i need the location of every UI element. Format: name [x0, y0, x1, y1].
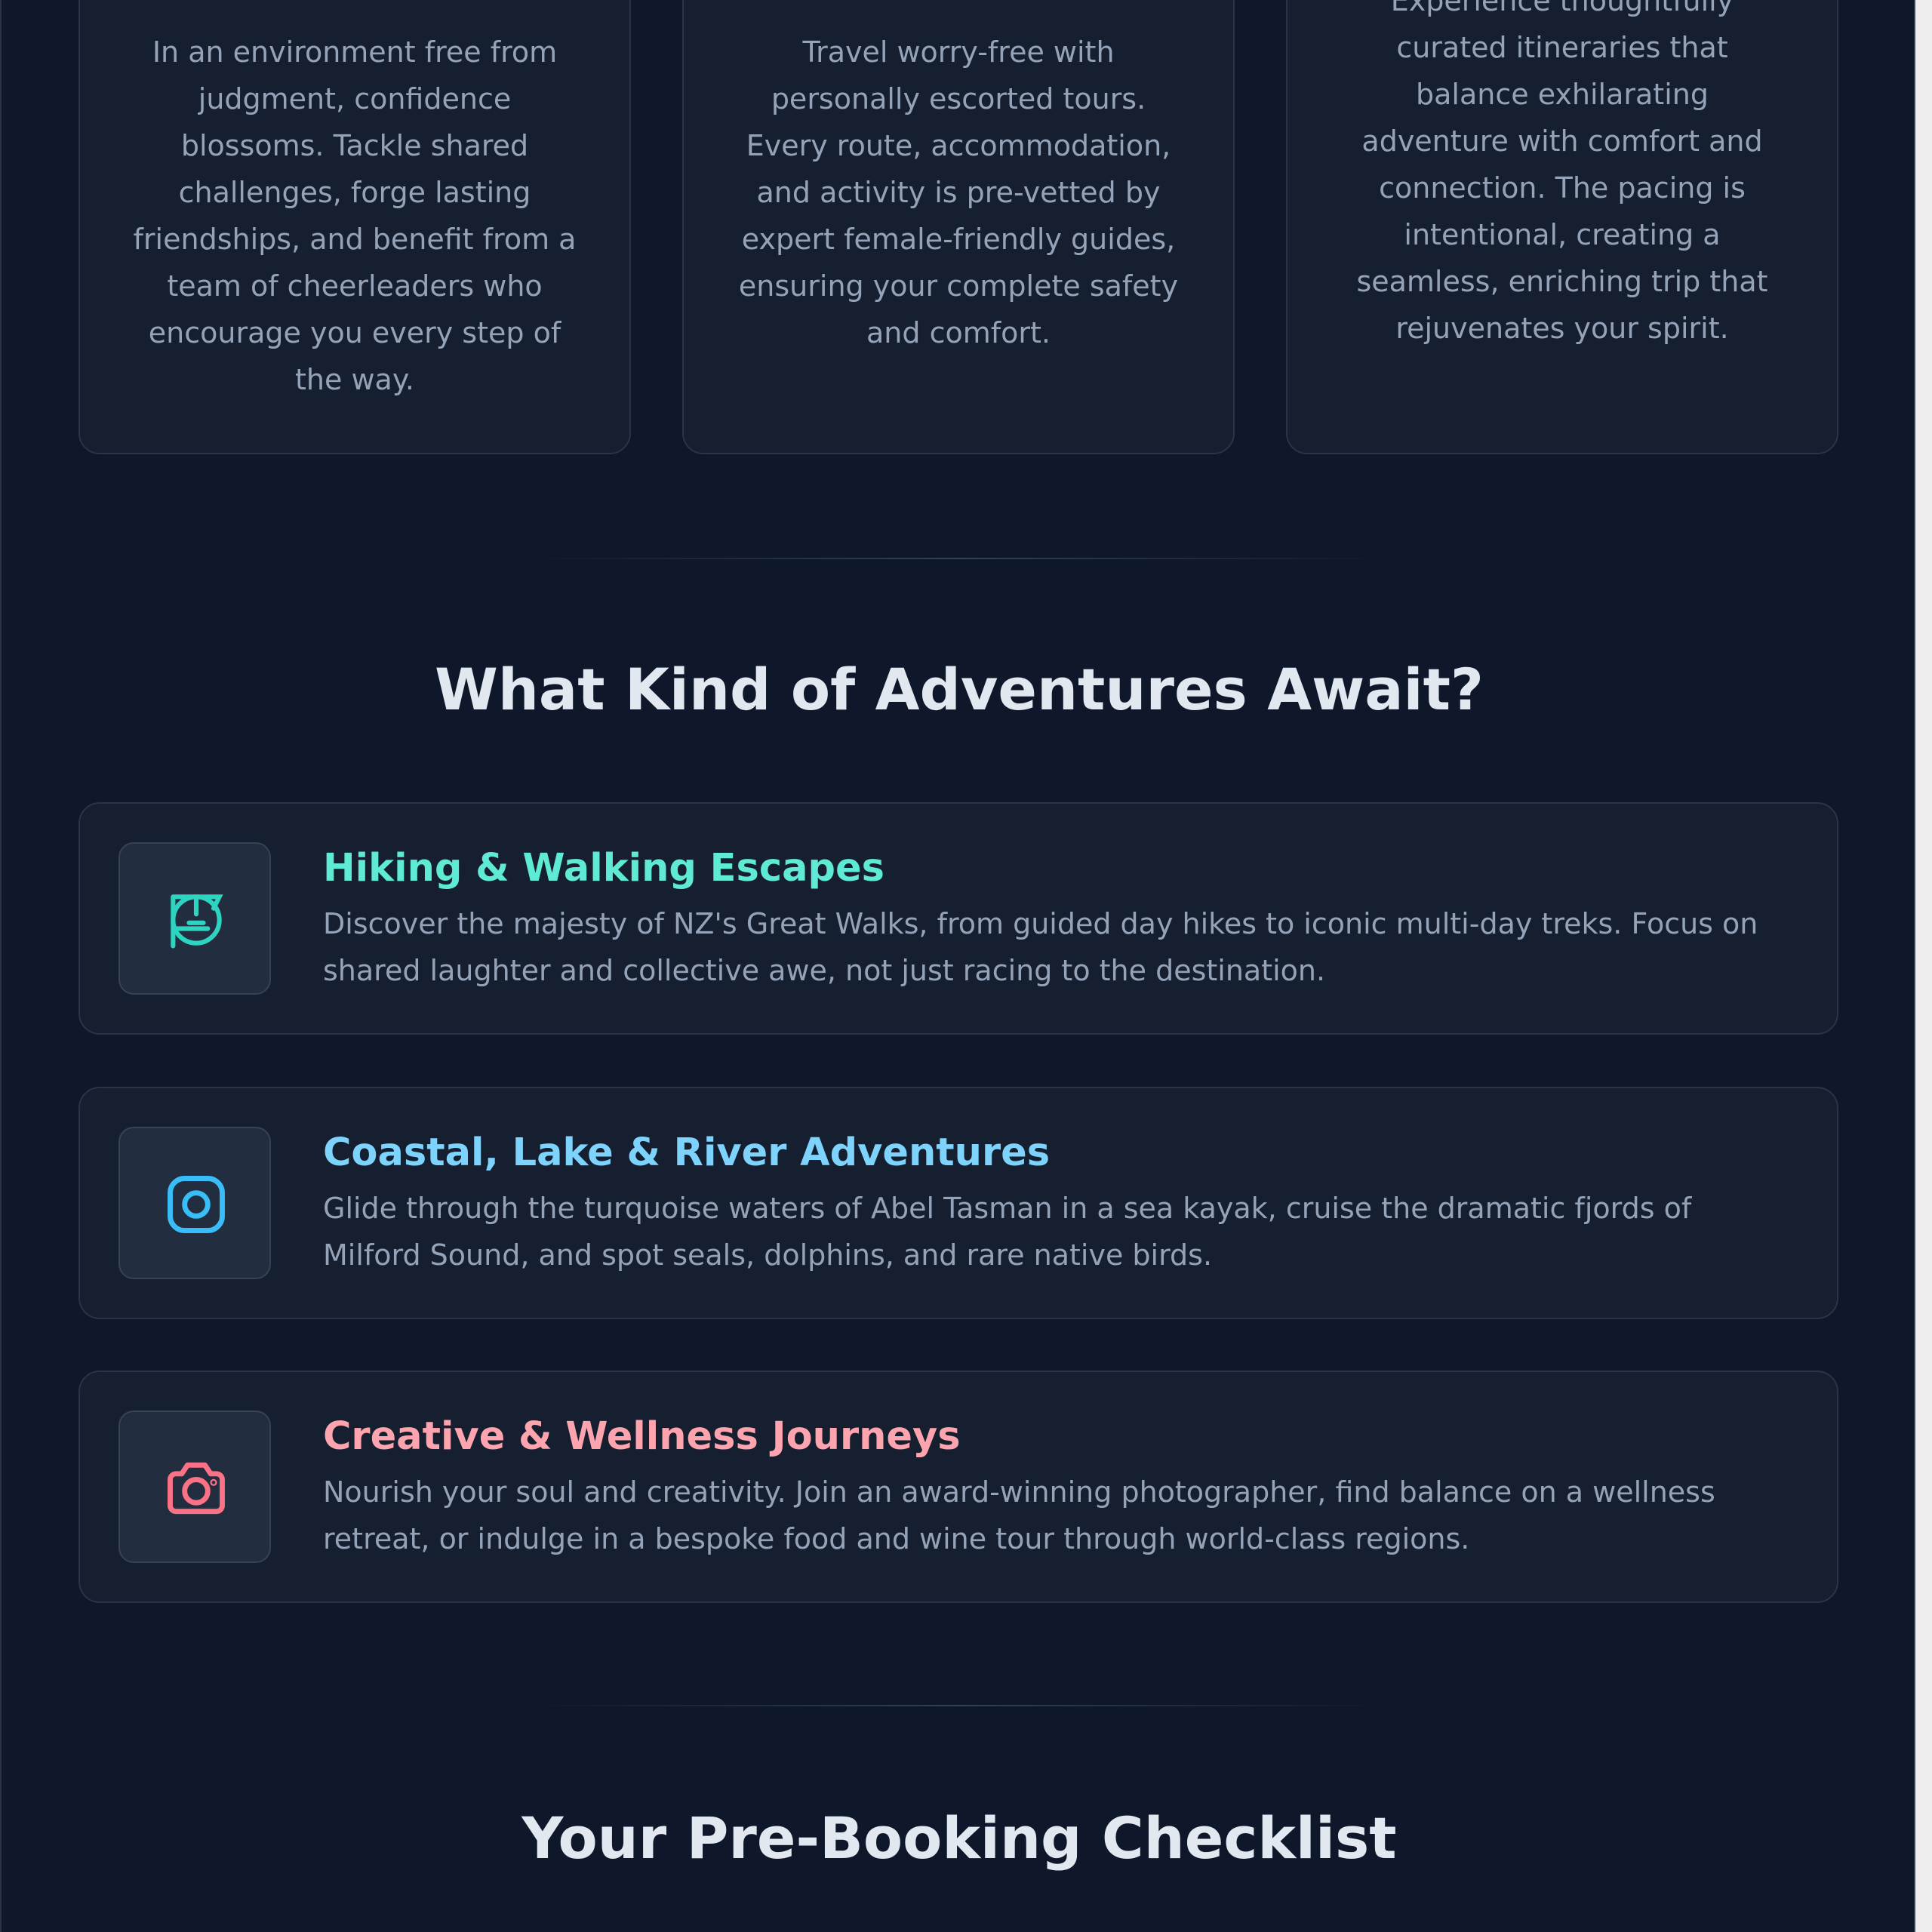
text: community description: the way. — [295, 363, 414, 396]
icon: camera — [118, 1411, 271, 1563]
text: itineraries description — [1356, 0, 1768, 345]
panel: safety card — [682, 0, 1235, 454]
text: hiking description: Discover the majesty of NZ's Great Walks, from guided day hikes to iconic multi-day treks. Focus on — [323, 907, 1758, 940]
text: safety description: personally escorted tours. — [771, 82, 1146, 115]
text: community description — [134, 35, 576, 396]
text: safety description — [739, 35, 1178, 349]
text: community description: judgment, confidence — [198, 82, 511, 115]
text: itineraries description: balance exhilarating — [1416, 78, 1709, 111]
panel: creative — [78, 1371, 1838, 1603]
text: community description: encourage you every step of — [149, 316, 561, 349]
text: itineraries description: adventure with comfort and — [1361, 125, 1763, 158]
text: creative description: retreat, or indulge in a bespoke food and wine tour through world-class regions. — [323, 1522, 1469, 1555]
panel: supportive community card — [78, 0, 631, 454]
text: creative description — [323, 1475, 1715, 1555]
text: safety description: and activity is pre-vetted by — [756, 176, 1161, 209]
icon: water — [118, 1127, 271, 1279]
text: community description: team of cheerleaders who — [167, 269, 543, 303]
text: safety description: expert female-friendly guides, — [742, 223, 1175, 256]
icon: hiking — [118, 842, 271, 995]
text: safety description: Travel worry-free with — [802, 35, 1115, 69]
text: creative description: Nourish your soul and creativity. Join an award-winning photographer, find balance on a wellness — [323, 1475, 1715, 1509]
panel: coastal — [78, 1087, 1838, 1319]
text: itineraries description: curated itineraries that — [1396, 31, 1728, 64]
text: itineraries description: intentional, creating a — [1404, 218, 1721, 251]
text: itineraries description: connection. The pacing is — [1379, 171, 1746, 205]
title: creative: Creative & Wellness Journeys — [323, 1414, 961, 1459]
panel: hiking — [78, 802, 1838, 1035]
text: community description: blossoms. Tackle shared — [181, 129, 528, 162]
text: safety description: ensuring your complete safety — [739, 269, 1178, 303]
text: coastal description: Milford Sound, and spot seals, dolphins, and rare native birds. — [323, 1238, 1212, 1272]
text: safety description: and comfort. — [866, 316, 1051, 349]
title: coastal: Coastal, Lake & River Adventures — [323, 1131, 1050, 1175]
text: coastal description: Glide through the turquoise waters of Abel Tasman in a sea kayak, cruise the dramatic fjords of — [323, 1192, 1691, 1225]
text: community description: In an environment free from — [152, 35, 557, 69]
heading: checklist: Your Pre-Booking Checklist — [521, 1804, 1397, 1872]
text: coastal description — [323, 1192, 1692, 1272]
text: hiking description: shared laughter and collective awe, not just racing to the destination. — [323, 954, 1325, 987]
panel: itineraries card — [1286, 0, 1838, 454]
heading: adventures: What Kind of Adventures Await? — [435, 656, 1484, 723]
title: hiking: Hiking & Walking Escapes — [323, 846, 884, 891]
text: safety description: Every route, accommodation, — [746, 129, 1171, 162]
text: community description: challenges, forge lasting — [179, 176, 531, 209]
text: itineraries description: rejuvenates your spirit. — [1395, 312, 1729, 345]
text: hiking description — [323, 907, 1758, 987]
text: itineraries description: seamless, enriching trip that — [1356, 265, 1768, 298]
text: community description: friendships, and benefit from a — [134, 223, 576, 256]
